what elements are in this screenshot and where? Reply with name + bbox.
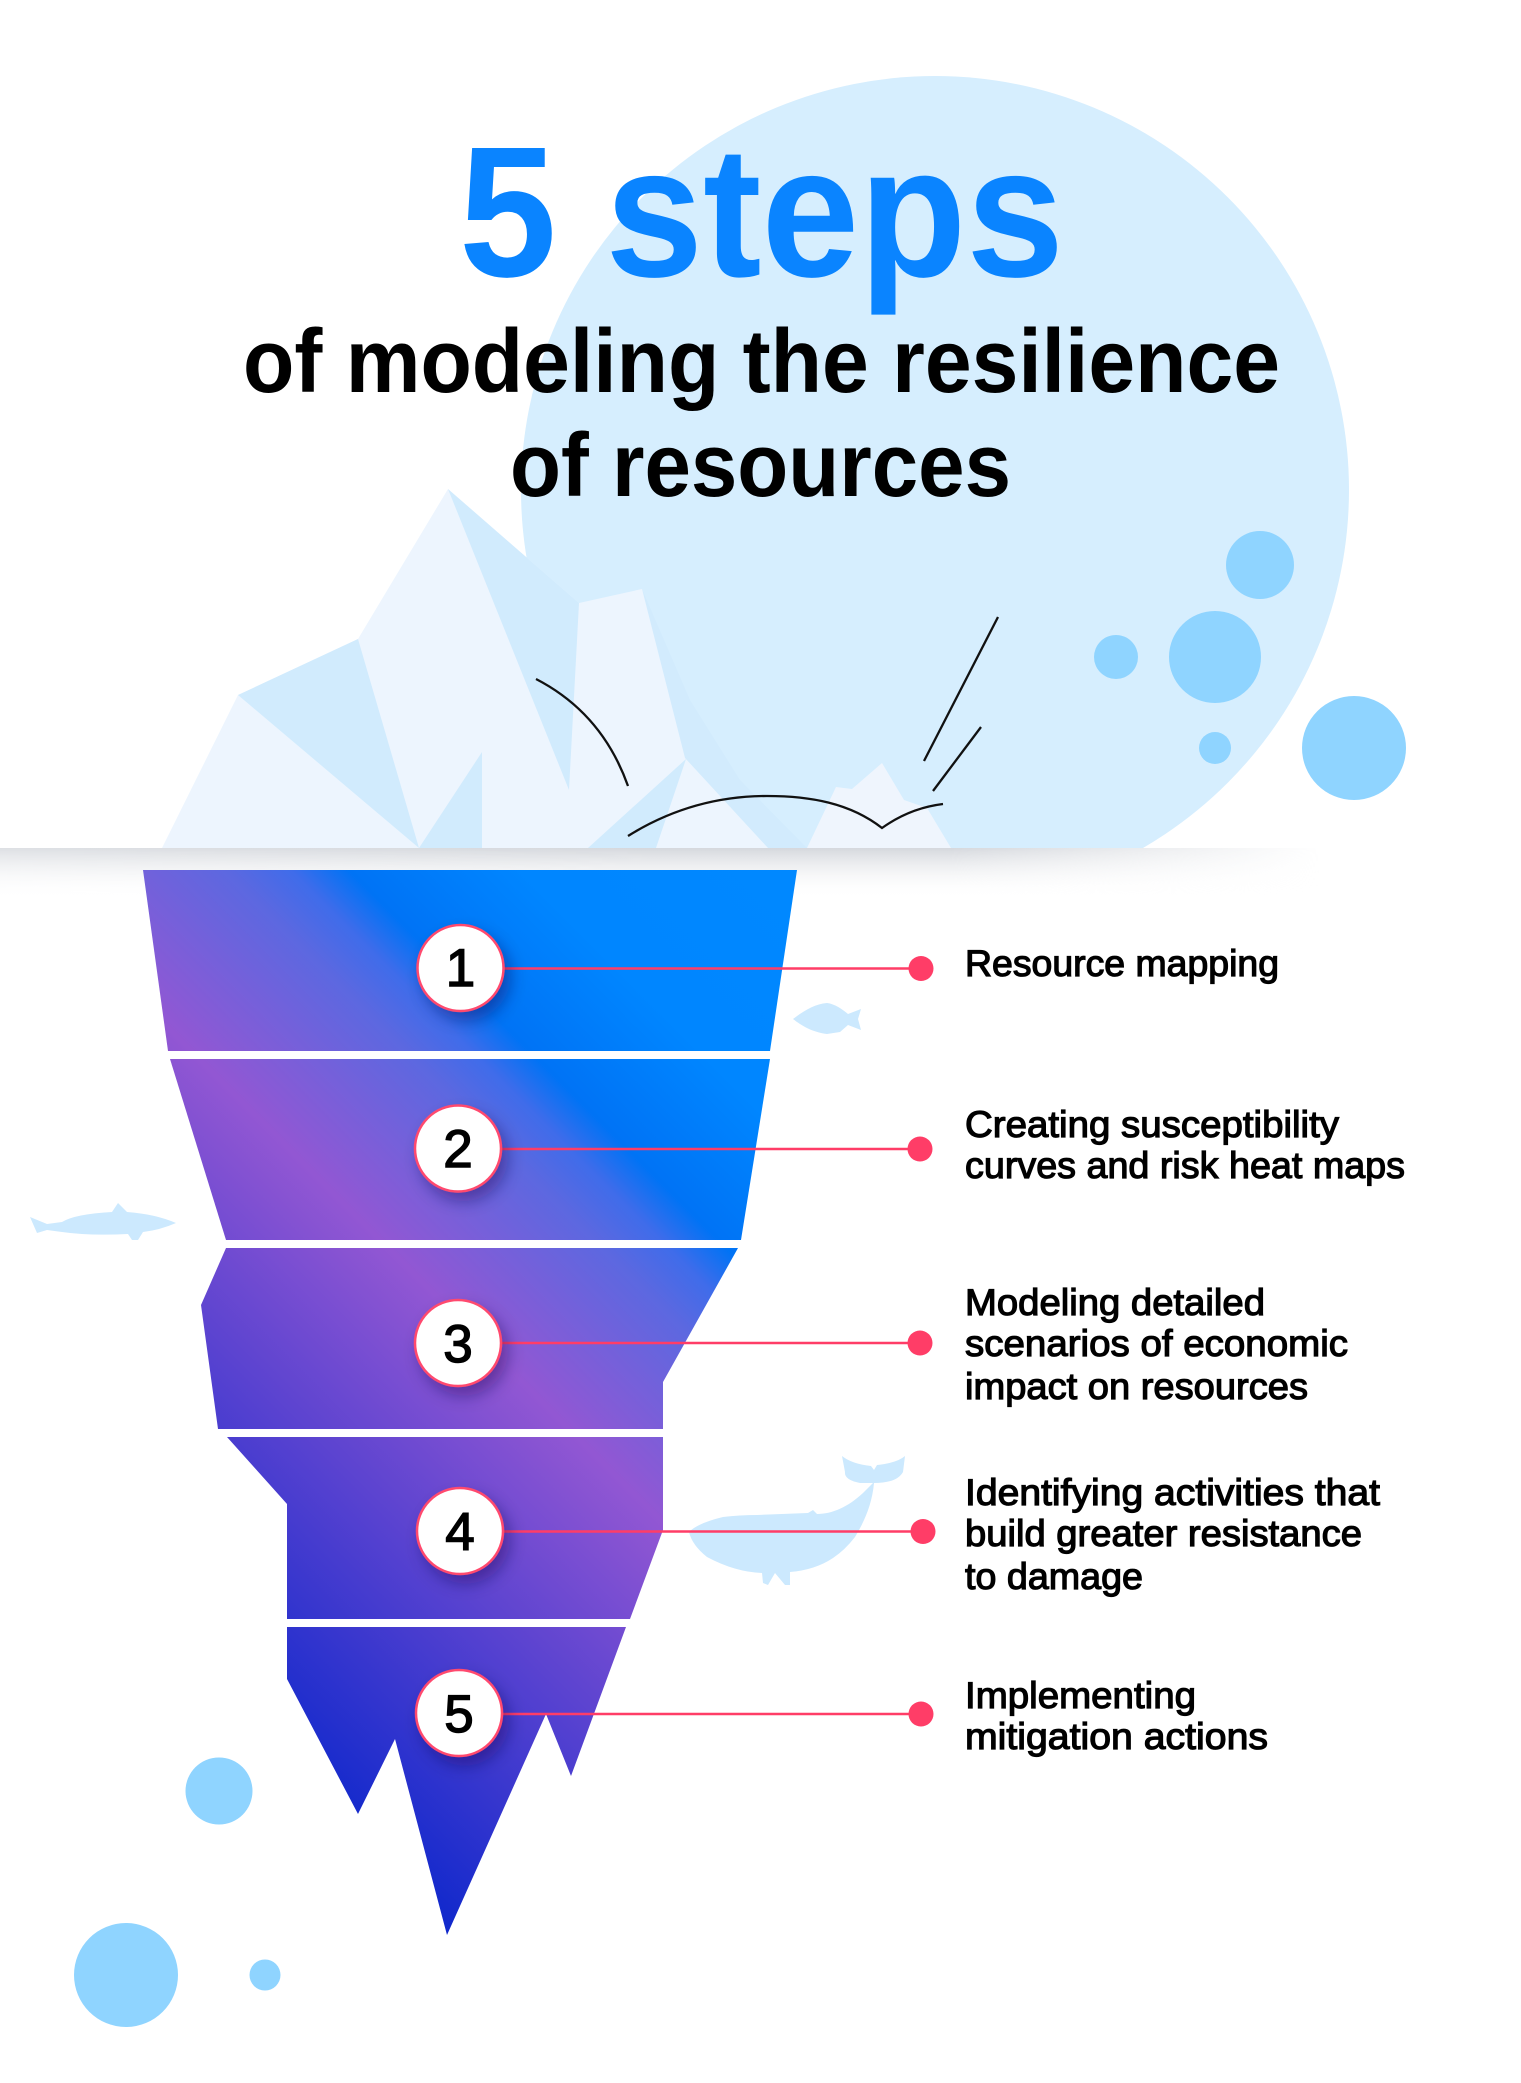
badge 5 xyxy=(416,1670,502,1756)
dot 2 xyxy=(908,1136,932,1162)
label 1: Resource mapping xyxy=(965,943,1279,984)
label 2: curves and risk heat maps xyxy=(965,1145,1405,1186)
label 5: mitigation actions xyxy=(965,1716,1268,1757)
label 3 xyxy=(965,1282,1348,1407)
label 4 xyxy=(965,1472,1381,1597)
background circle xyxy=(521,76,1349,904)
dot 5 xyxy=(908,1702,934,1726)
dot 3 xyxy=(908,1330,932,1356)
whale xyxy=(689,1456,905,1585)
label 2: Creating susceptibility xyxy=(965,1104,1340,1145)
shark xyxy=(30,1203,176,1240)
subtitle xyxy=(243,312,1280,516)
title xyxy=(243,109,1280,516)
title: 5 steps xyxy=(459,109,1064,316)
label 5 xyxy=(965,1675,1268,1757)
badge 1 xyxy=(418,925,504,1011)
iceberg segments below water xyxy=(143,870,797,1935)
step 1 xyxy=(418,925,1279,1011)
badge 2 xyxy=(415,1106,501,1192)
step 5 xyxy=(416,1670,1268,1757)
step 1: 1 xyxy=(446,939,475,998)
step 2 xyxy=(415,1104,1405,1192)
dot 4 xyxy=(910,1519,936,1544)
label 5: Implementing xyxy=(965,1675,1196,1716)
bubbles upper right xyxy=(1094,531,1406,800)
water line shadow xyxy=(0,848,1246,876)
step 3: 3 xyxy=(443,1315,473,1374)
bubbles lower left xyxy=(74,1758,280,2027)
iceberg above water xyxy=(162,489,951,848)
label 2 xyxy=(965,1104,1405,1186)
label 3: impact on resources xyxy=(965,1366,1308,1407)
step 3 xyxy=(415,1282,1348,1407)
dot 1 xyxy=(908,956,934,981)
subtitle: of modeling the resilience xyxy=(243,312,1280,412)
subtitle: of resources xyxy=(510,416,1011,516)
step 4: 4 xyxy=(445,1503,475,1562)
step 4 xyxy=(417,1472,1381,1597)
label 3: scenarios of economic xyxy=(965,1323,1348,1364)
label 4: to damage xyxy=(965,1556,1143,1597)
small fish xyxy=(793,1003,861,1034)
label 3: Modeling detailed xyxy=(965,1282,1265,1323)
crack lines xyxy=(536,617,998,836)
step 5: 5 xyxy=(444,1685,474,1744)
label 4: Identifying activities that xyxy=(965,1472,1381,1513)
badge 3 xyxy=(415,1300,501,1386)
step 2: 2 xyxy=(443,1120,473,1179)
badge 4 xyxy=(417,1488,503,1574)
label 4: build greater resistance xyxy=(965,1513,1362,1554)
